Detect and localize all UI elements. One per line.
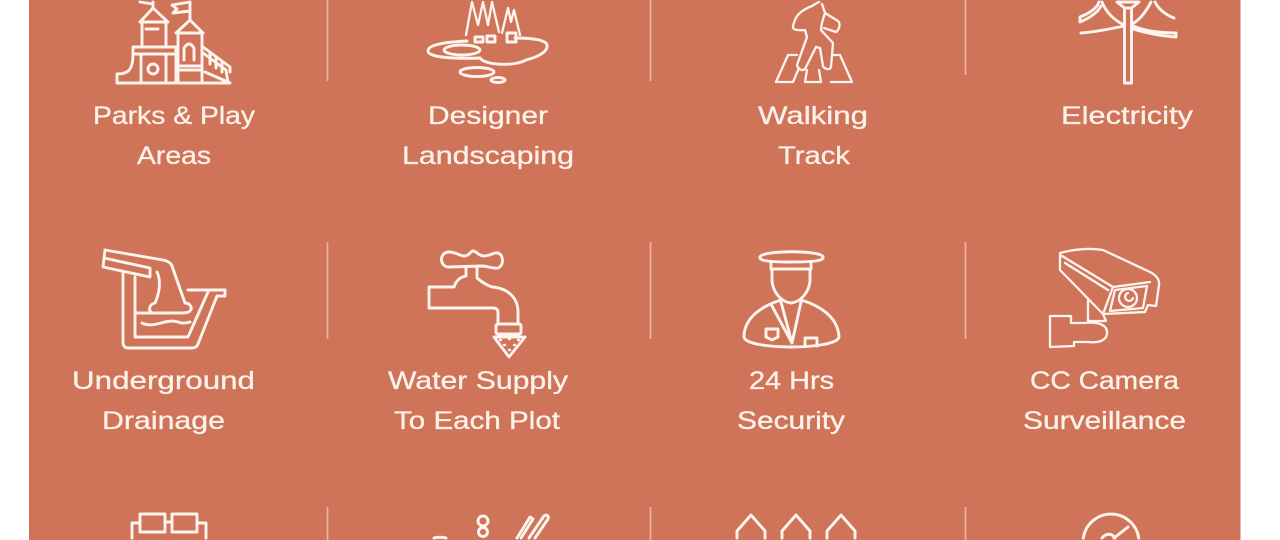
amenity: cc camera surveillance: [1023, 249, 1186, 435]
icon: pond and trees: [428, 2, 547, 82]
icon: security guard: [744, 252, 839, 347]
amenity: designer landscaping: [402, 2, 574, 170]
label: CC Camera Surveillance: [1023, 367, 1186, 435]
icon: play castle: [117, 2, 230, 83]
icon: fence (cropped): [737, 515, 855, 538]
label: Parks & Play Areas: Areas: [137, 142, 211, 170]
label: 24 Hrs Security: Security: [737, 407, 846, 435]
icon: water tap: [429, 251, 525, 357]
label: Underground Drainage: [72, 367, 255, 435]
label: Designer Landscaping: [402, 102, 574, 170]
amenity: 24 hrs security: [737, 252, 846, 435]
label: Underground Drainage: Underground: [72, 367, 255, 395]
label: 24 Hrs Security: 24 Hrs: [749, 367, 834, 395]
label: Parks & Play Areas: Parks & Play: [93, 102, 256, 130]
label: Water Supply To Each Plot: To Each Plot: [394, 407, 560, 435]
icon: badge circle (cropped): [1083, 514, 1139, 538]
label: Underground Drainage: Drainage: [102, 407, 225, 435]
icon: electric pole: [1080, 2, 1176, 83]
label: CC Camera Surveillance: CC Camera: [1030, 367, 1179, 395]
label: Electricity: Electricity: [1061, 102, 1194, 130]
icon: drain pipe: [103, 250, 225, 348]
amenity: underground drainage: [72, 250, 255, 435]
amenity: water supply to each plot: [388, 251, 569, 435]
icon: garden tools (cropped): [434, 515, 548, 538]
label: Walking Track: Walking: [758, 102, 868, 130]
label: 24 Hrs Security: [737, 367, 846, 435]
icon: cctv camera: [1050, 249, 1159, 347]
label: Designer Landscaping: Landscaping: [402, 142, 574, 170]
icon: pedestrian on crossing: [776, 2, 852, 82]
label: Walking Track: [758, 102, 868, 170]
amenity: electricity: [1061, 2, 1194, 130]
label: Parks & Play Areas: [93, 102, 256, 170]
icon: bench (cropped): [132, 514, 206, 538]
amenity: walking track: [758, 2, 868, 170]
label: Walking Track: Track: [778, 142, 851, 170]
label: Designer Landscaping: Designer: [428, 102, 548, 130]
amenity: parks and play areas: [93, 2, 256, 170]
label: Water Supply To Each Plot: [388, 367, 569, 435]
label: Water Supply To Each Plot: Water Supply: [388, 367, 569, 395]
label: CC Camera Surveillance: Surveillance: [1023, 407, 1186, 435]
